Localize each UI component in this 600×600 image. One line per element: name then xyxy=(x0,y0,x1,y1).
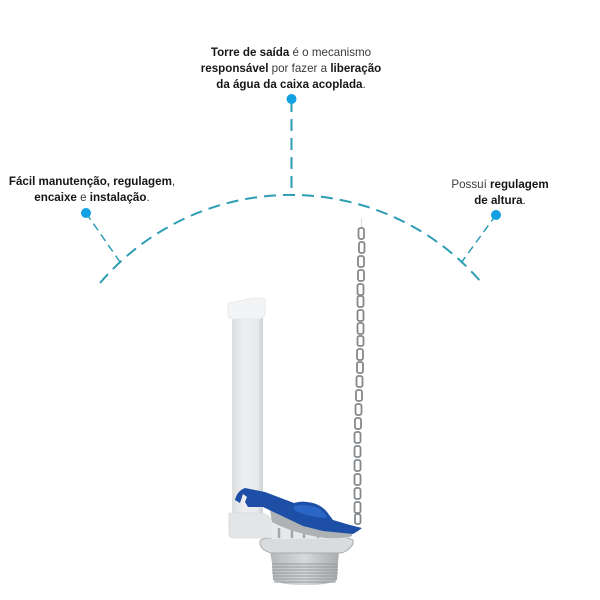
text: left callout: Fácil manutenção, regulagem, xyxy=(9,175,175,188)
text: right callout: . xyxy=(523,194,526,207)
blue flapper xyxy=(235,488,362,534)
text: top callout: da água da caixa acoplada xyxy=(216,78,363,91)
support ribs xyxy=(272,518,352,539)
text: left callout: encaixe xyxy=(34,191,77,204)
top leader line xyxy=(286,94,296,196)
product: flush valve tower xyxy=(228,218,364,585)
tube cap xyxy=(228,298,265,319)
left leader line xyxy=(81,208,120,262)
text: left callout: e instalação. xyxy=(80,191,150,204)
text: right callout: de altura xyxy=(474,194,523,207)
flapper plate and arm xyxy=(235,488,362,534)
text: top callout: por fazer a liberação xyxy=(272,62,381,75)
text: top callout: Torre de saída é o mecanismo xyxy=(211,46,371,59)
dashed arc xyxy=(100,195,481,283)
text: right callout: Possuí regulagem xyxy=(451,178,549,191)
flapper dome highlight xyxy=(294,505,327,518)
text: top callout: . xyxy=(363,78,366,91)
threaded base xyxy=(270,551,339,585)
chain xyxy=(354,218,364,524)
gray seat ring xyxy=(270,510,352,538)
text: top callout: responsável xyxy=(201,62,268,75)
right leader line xyxy=(461,210,501,263)
collar xyxy=(229,513,273,538)
overflow tube xyxy=(232,316,263,516)
flange xyxy=(260,538,353,553)
